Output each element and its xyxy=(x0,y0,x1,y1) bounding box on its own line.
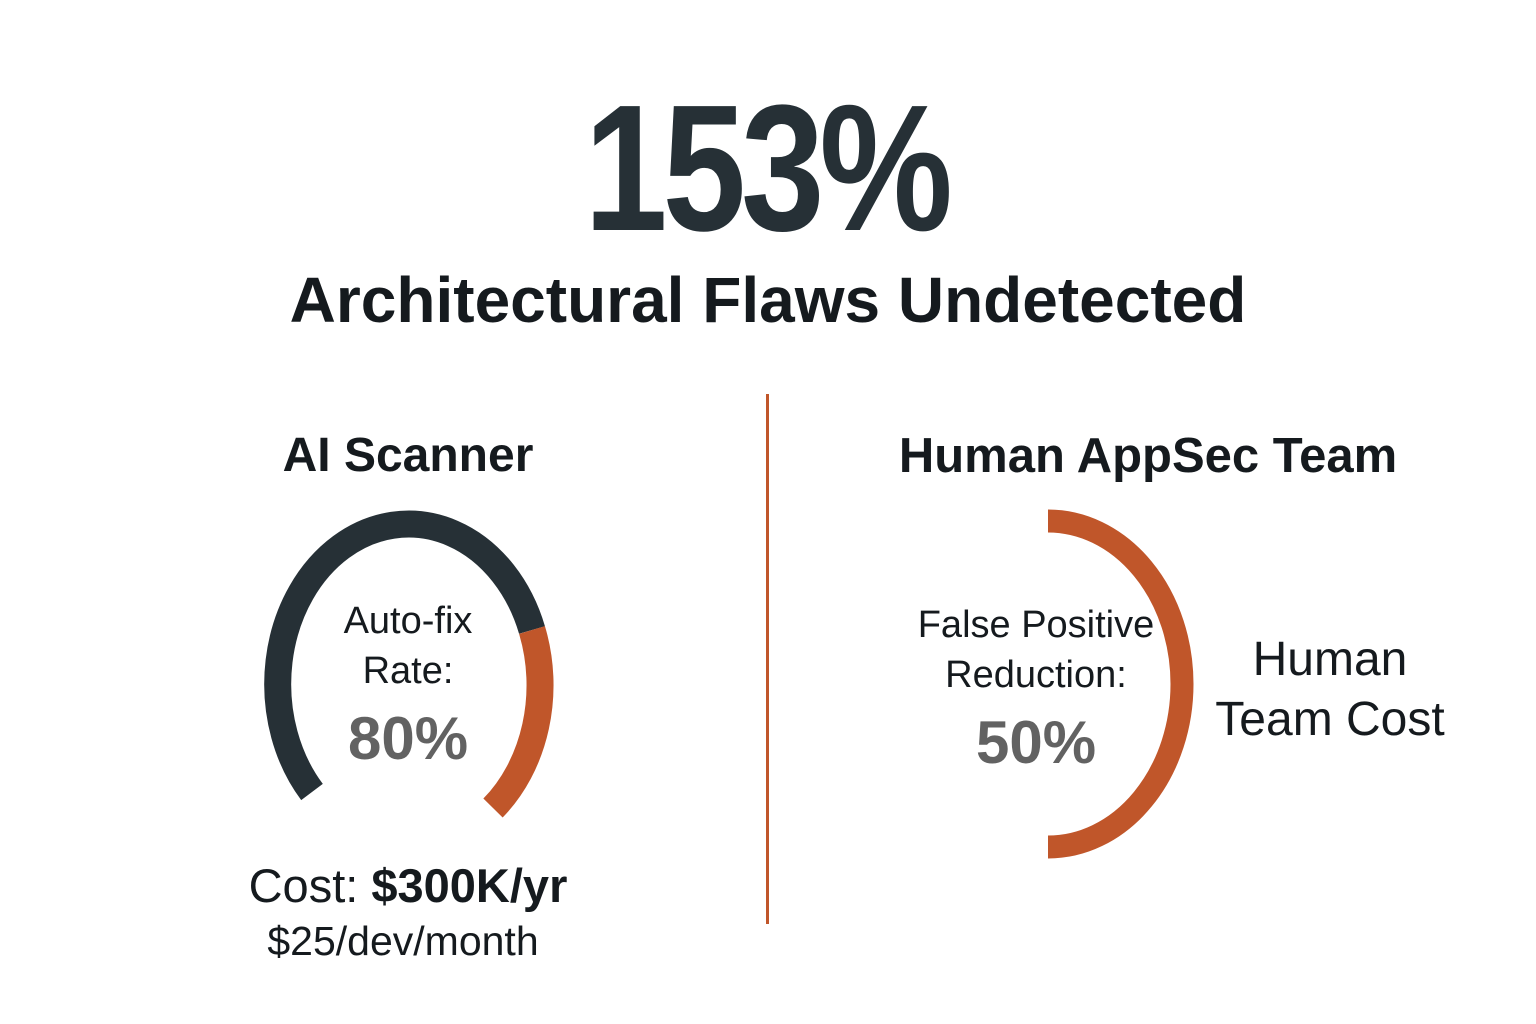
gauge label: False Positive xyxy=(918,604,1154,646)
per dev cost: $25/dev/month xyxy=(267,918,539,964)
gauge label xyxy=(344,600,472,692)
headline number: 153% xyxy=(584,67,948,268)
gauge: auto-fix xyxy=(264,510,554,818)
gauge label: Reduction: xyxy=(945,654,1127,696)
heading: AI Scanner: AI Scanner xyxy=(283,429,533,482)
side label: human team cost xyxy=(1215,633,1445,746)
subtitle: Architectural Flaws Undetected xyxy=(290,264,1246,336)
gauge value: 80% xyxy=(348,705,468,772)
gauge: false positive xyxy=(1048,510,1194,858)
heading: Human AppSec Team: Human AppSec Team xyxy=(899,429,1397,483)
gauge label xyxy=(918,604,1154,696)
panel: human team xyxy=(899,429,1445,858)
gauge value: 50% xyxy=(976,709,1096,776)
gauge label: Auto-fix xyxy=(344,600,472,642)
side label: human team cost: Team Cost xyxy=(1215,693,1445,746)
side label: human team cost: Human xyxy=(1253,633,1407,686)
gauge label: Rate: xyxy=(363,650,453,692)
panel: AI scanner xyxy=(249,429,567,964)
cost text: Cost: $300K/yr xyxy=(249,859,567,912)
divider xyxy=(766,394,769,924)
